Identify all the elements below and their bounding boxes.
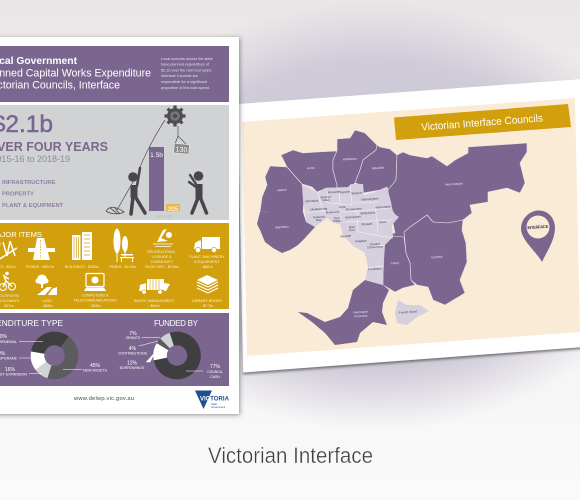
funding labels: BORROWINGS — [120, 366, 145, 370]
map labels: Melton — [277, 188, 287, 192]
panel: header — [0, 46, 229, 102]
council: Cardinia — [404, 215, 467, 305]
header note: have planned expenditure of — [161, 62, 210, 66]
funding labels: 77% — [210, 364, 221, 370]
map labels: Glen — [349, 225, 356, 229]
council: Hume — [281, 150, 337, 192]
banner: Victorian Interface Councils — [394, 104, 571, 140]
map labels: Moonee — [320, 195, 332, 199]
icon: cyclist — [0, 272, 16, 290]
expenditure labels: NEW ASSETS — [83, 368, 108, 372]
map labels: Maroondah — [375, 204, 391, 210]
icon: person pulling rope — [128, 168, 145, 214]
item labels: LAND — [42, 299, 52, 303]
council: Yarra Ranges — [383, 143, 527, 238]
leader lines — [19, 338, 203, 374]
item labels: COMPUTERS & — [81, 294, 109, 298]
item labels: LEISURE & — [152, 255, 172, 259]
council: Casey — [383, 235, 415, 292]
logo: Victoria State Government: Government — [211, 405, 226, 409]
map labels: Cardinia — [431, 255, 443, 259]
item labels: - $65m — [41, 304, 53, 308]
map labels: Boroondara — [346, 206, 362, 212]
banner: Victorian Interface Councils: Victorian Interface Councils — [421, 112, 543, 134]
icon: library books — [197, 275, 218, 293]
map labels: Greater — [370, 242, 380, 246]
header note: $2.1b over the next four years. — [161, 68, 212, 72]
header note: Interface Councils are — [161, 74, 198, 78]
panel: expenditure and funding — [0, 313, 229, 386]
funding labels: 12% — [127, 360, 138, 366]
item labels: - $35m — [89, 304, 101, 308]
council: Wyndham — [257, 212, 315, 253]
map labels: Yarra Ranges — [445, 181, 464, 187]
bar chart: 395 — [168, 206, 179, 213]
map labels: Whitehorse — [360, 210, 376, 216]
heading: funded by: FUNDED BY — [154, 319, 199, 328]
item labels: WASTE MANAGEMENT — [134, 299, 175, 303]
expenditure labels: 45% — [90, 363, 101, 369]
funding labels: CASH — [210, 375, 220, 379]
header note: proportion of this total spend. — [161, 86, 210, 90]
logo: Victoria State Government: State — [211, 402, 218, 406]
icon: land — [36, 274, 57, 295]
metropolitan councils — [302, 184, 399, 285]
item labels: TELECOMMUNICATIONS — [73, 298, 117, 302]
logo: Victoria State Government: VICTORIA — [200, 397, 230, 403]
header note — [161, 57, 213, 90]
donut chart: expenditure type — [31, 332, 78, 379]
council: Melton — [260, 166, 304, 213]
icon: computer — [84, 274, 106, 291]
item labels: FACILITIES - $103m — [145, 265, 179, 269]
council: Whittlesea — [333, 130, 377, 188]
map labels: Kingston — [355, 239, 367, 243]
header note: Local councils across the state — [161, 57, 213, 61]
item labels: PLANT, MACHINERY — [189, 255, 225, 259]
funding labels: CONTRIBUTIONS — [118, 352, 148, 356]
bar chart: 1.5b — [150, 152, 163, 159]
funding labels: 7% — [129, 331, 137, 337]
map labels: Whittlesea — [343, 156, 357, 161]
caption: Victorian Interface — [208, 443, 373, 468]
item labels: - $7.7m — [201, 304, 213, 308]
map labels: Port — [334, 216, 340, 220]
map labels: Monash — [361, 222, 373, 226]
icon: gear — [164, 106, 186, 126]
bar chart — [149, 147, 180, 218]
item labels: RECREATIONAL, — [147, 250, 177, 254]
rope and hanging sign: 130 — [175, 146, 188, 154]
map labels: Hume — [307, 166, 315, 170]
map labels: Eira — [349, 228, 355, 232]
expenditure labels — [0, 334, 108, 376]
item labels: & EQUIPMENT — [194, 260, 220, 264]
item labels: LIBRARY BOOKS — [192, 299, 222, 303]
category list: PLANT & EQUIPMENT — [2, 203, 64, 209]
council: French Island — [395, 300, 429, 325]
item labels: COMMUNITY — [151, 260, 174, 264]
rope and hanging sign — [117, 120, 189, 210]
map labels: Mornington — [353, 309, 369, 315]
header note: responsible for a significant — [161, 80, 208, 84]
funding labels: 4% — [129, 346, 137, 352]
map labels: Bay — [316, 218, 322, 222]
map labels: Valley — [322, 198, 331, 202]
map labels: Wyndham — [275, 225, 289, 229]
icon: parks — [114, 228, 134, 262]
map labels: Moreland — [328, 190, 341, 194]
icon: rope coil — [106, 207, 124, 214]
map labels: Maribyrnong — [310, 206, 328, 212]
map labels: Hobsons — [313, 215, 325, 219]
category list: INFRASTRUCTURE — [2, 180, 56, 186]
icon: recreation swimmer — [153, 229, 173, 246]
map labels: Manningham — [361, 196, 379, 202]
map labels: Peninsula — [354, 314, 368, 318]
map labels: Nillumbik — [372, 166, 385, 170]
icon: interface location pin: INTERFACE — [527, 224, 549, 230]
council: Mornington Peninsula — [298, 280, 389, 345]
infographic poster — [0, 37, 239, 414]
map labels: Yarra — [338, 205, 346, 209]
map card — [238, 78, 580, 372]
icon: waste truck — [139, 279, 170, 294]
map labels: Phillip — [333, 219, 341, 223]
expenditure labels: 16% — [5, 367, 16, 373]
map labels: Casey — [391, 261, 400, 265]
map labels: Bayside — [340, 234, 352, 238]
icon: person watching — [189, 171, 206, 213]
category list — [2, 180, 64, 209]
map labels: Banyule — [351, 191, 363, 195]
item labels: ROADS - $507m — [26, 265, 54, 269]
map labels: Darebin — [340, 190, 351, 194]
panel: major items — [0, 223, 229, 309]
icon: plant and machinery truck — [194, 237, 220, 253]
funding labels: GRANTS — [126, 336, 141, 340]
item labels: - $43m — [148, 304, 160, 308]
map labels: French Island — [399, 309, 417, 315]
footer url: www.delwp.vic.gov.au — [73, 396, 134, 402]
map labels: Dandenong — [367, 244, 383, 250]
icon: roads — [28, 238, 55, 260]
item labels: - $88 m — [201, 265, 213, 269]
item labels: BUILDINGS - $330m — [65, 265, 99, 269]
icon: interface location pin — [521, 210, 555, 262]
funding labels: COUNCIL — [207, 370, 223, 374]
donut chart: funded by — [153, 331, 201, 380]
map: Victorian interface councils — [257, 130, 527, 345]
title — [0, 56, 151, 92]
icon: buildings — [72, 232, 92, 260]
category list: PROPERTY — [2, 192, 34, 198]
funding labels — [118, 331, 223, 379]
map background — [242, 98, 580, 356]
bar chart: $MILLION — [156, 214, 173, 218]
map labels — [275, 156, 464, 318]
map labels: Frankston — [368, 267, 382, 271]
panel: total spend — [0, 105, 229, 220]
item labels: - $71m — [2, 304, 14, 308]
map labels: Knox — [379, 220, 387, 224]
logo: Victoria State Government — [195, 390, 230, 409]
map labels: Stonnington — [345, 214, 361, 220]
item labels — [0, 250, 225, 308]
item labels: PARKS - $104m — [109, 265, 136, 269]
map labels: Brimbank — [305, 199, 319, 203]
council: Nillumbik — [355, 145, 397, 193]
map labels: Melbourne — [326, 209, 340, 214]
icon: bridges — [0, 241, 17, 260]
